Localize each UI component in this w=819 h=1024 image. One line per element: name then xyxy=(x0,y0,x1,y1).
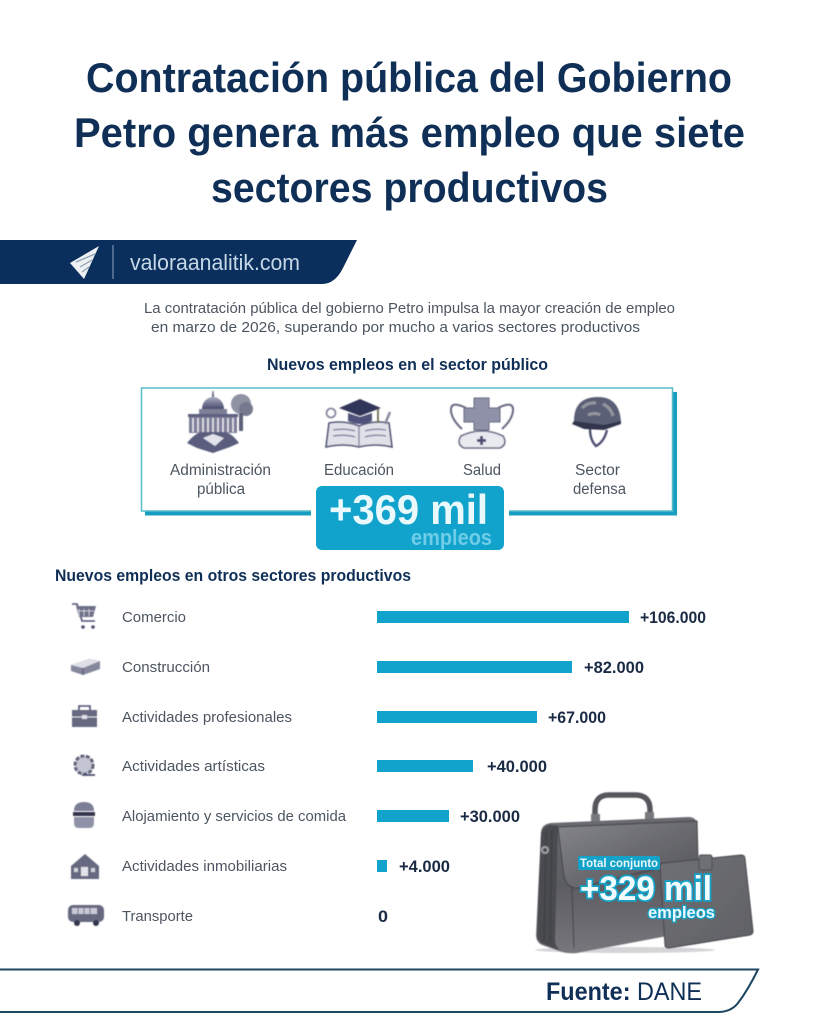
icon: paper plane logo xyxy=(70,246,99,279)
callout: +369 mil empleos: empleos xyxy=(411,525,492,550)
panel: public sector xyxy=(142,388,675,550)
icon: briefcase xyxy=(72,706,97,727)
row: actividades inmobiliarias: +4.000 xyxy=(399,857,450,876)
source footer: Fuente: DANE xyxy=(546,978,702,1006)
intro text: La contratación pública del gobierno Petro impulsa la mayor creación de empleo xyxy=(144,300,675,317)
row: comercio xyxy=(72,604,706,629)
row: actividades inmobiliarias: Actividades inmobiliarias xyxy=(122,858,287,875)
brand banner xyxy=(0,240,357,284)
row: transporte: 0 xyxy=(378,907,388,926)
icon: cart xyxy=(72,604,96,629)
label: sector defensa: defensa xyxy=(573,481,626,498)
callout: total conjunto: Total conjunto xyxy=(580,856,658,870)
icon: folio xyxy=(660,855,753,948)
icon: palette xyxy=(75,756,95,775)
label: educación: Educación xyxy=(324,462,394,479)
illustration: briefcase total callout xyxy=(535,795,753,953)
icon: brick xyxy=(71,659,100,675)
website: valoraanalitik.com xyxy=(130,250,300,275)
icon: burger xyxy=(73,802,95,828)
row: actividades artísticas: Actividades artísticas xyxy=(122,758,265,775)
row: comercio: +106.000 xyxy=(640,608,706,627)
row: alojamiento y servicios de comida xyxy=(73,802,520,828)
heading: public sector: Nuevos empleos en el sector público xyxy=(267,355,548,374)
row: actividades inmobiliarias xyxy=(71,854,450,879)
row: actividades profesionales: +67.000 xyxy=(548,708,606,727)
callout: total conjunto: +329 mil xyxy=(580,870,712,908)
row: transporte: Transporte xyxy=(122,908,193,925)
intro text xyxy=(144,300,675,336)
icon: medical cross xyxy=(451,398,513,448)
row: construcción: +82.000 xyxy=(584,658,644,677)
callout: +369 mil empleos xyxy=(311,484,509,550)
row: construcción: Construcción xyxy=(122,659,210,676)
intro text: en marzo de 2026, superando por mucho a varios sectores productivos xyxy=(151,319,640,336)
row: actividades artísticas: +40.000 xyxy=(487,757,547,776)
label: administración pública: Administración xyxy=(170,462,271,479)
title: sectores productivos xyxy=(211,164,608,211)
icon: house xyxy=(71,854,99,879)
icon: briefcase xyxy=(535,795,715,953)
callout: total conjunto xyxy=(578,856,715,922)
label: administración pública xyxy=(170,462,271,498)
icon: book and cap xyxy=(326,399,392,447)
row: transporte xyxy=(68,905,388,926)
row: actividades artísticas xyxy=(75,756,547,776)
icon: government building xyxy=(187,391,253,453)
row: actividades profesionales xyxy=(72,706,606,727)
callout: total conjunto: empleos xyxy=(648,903,715,922)
heading: other sectors: Nuevos empleos en otros sectores productivos xyxy=(55,567,411,585)
source footer xyxy=(0,970,758,1012)
icon: helmet xyxy=(572,397,621,446)
title: Contratación pública del Gobierno xyxy=(86,54,732,101)
callout: +369 mil empleos: +369 mil xyxy=(329,486,488,533)
icon: bus xyxy=(68,905,104,926)
label: sector defensa: Sector xyxy=(575,462,620,479)
label: sector defensa xyxy=(573,462,626,498)
title xyxy=(74,54,745,211)
title: Petro genera más empleo que siete xyxy=(74,109,745,156)
row: actividades profesionales: Actividades profesionales xyxy=(122,709,292,726)
row: comercio: Comercio xyxy=(122,609,186,626)
row: alojamiento y servicios de comida: +30.000 xyxy=(460,807,520,826)
label: salud: Salud xyxy=(463,462,501,479)
row: alojamiento y servicios de comida: Alojamiento y servicios de comida xyxy=(122,808,347,825)
label: administración pública: pública xyxy=(197,481,245,498)
bar chart: other sectors xyxy=(68,604,706,926)
row: construcción xyxy=(71,658,644,677)
